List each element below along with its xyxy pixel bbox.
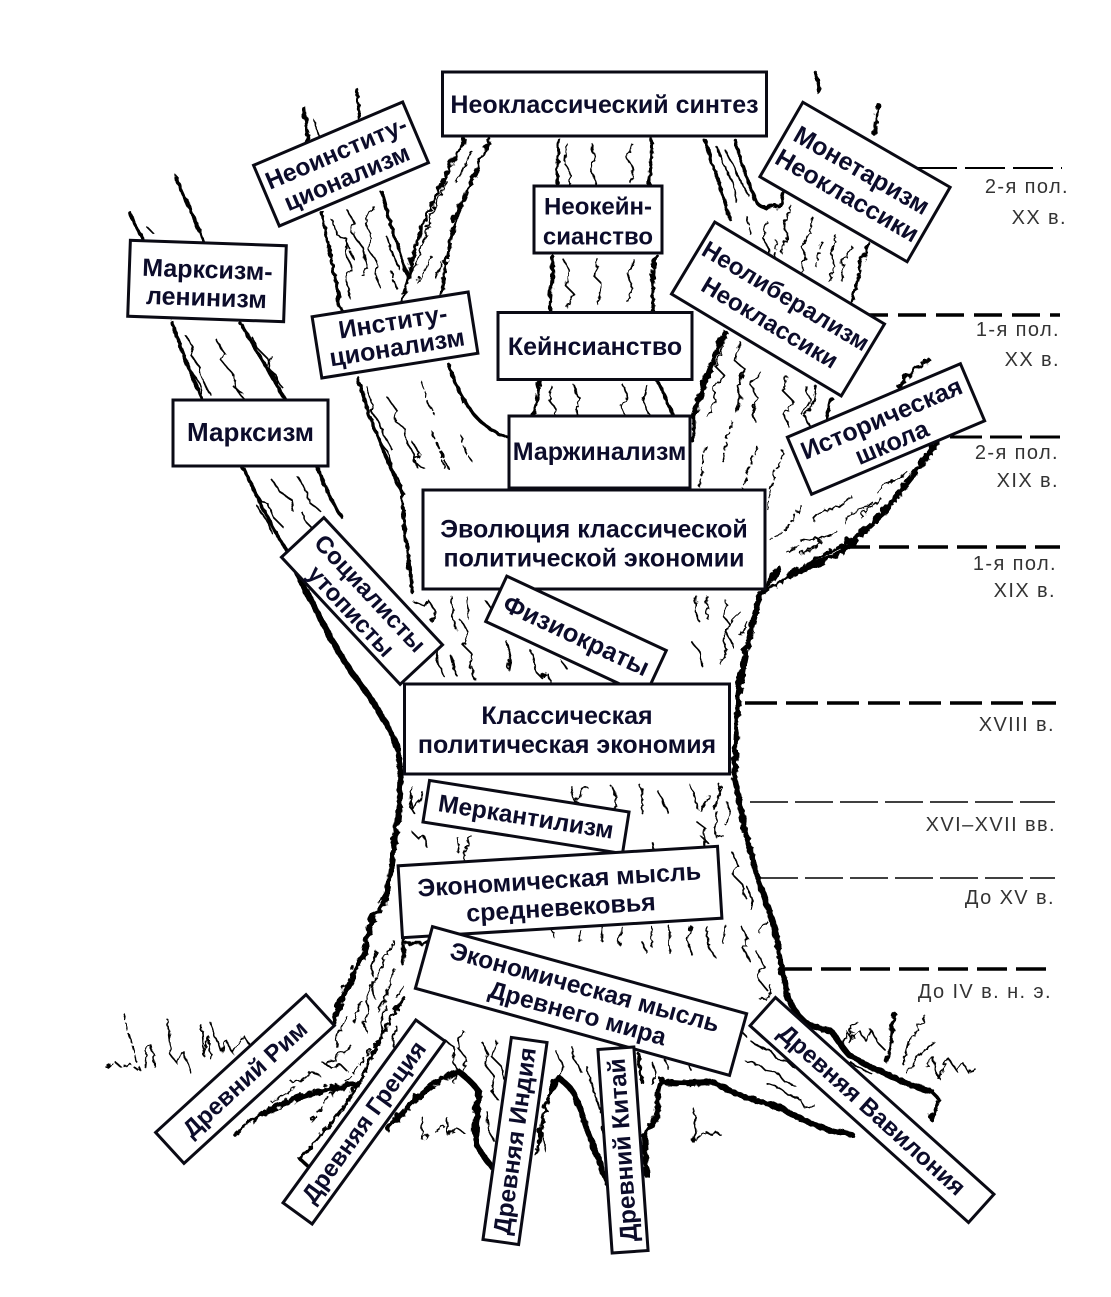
- label: Древняя Вавилония: Древняя Вавилония: [773, 1019, 971, 1201]
- grass right: [420, 1012, 973, 1140]
- label: Экономическая мысль Древнего мира: Экономическая мысль: [447, 938, 722, 1038]
- label: Институционализм: Институ-: [337, 300, 449, 345]
- era labels: До XV в.: [965, 887, 1055, 909]
- label: Экономическая мысль средневековья: средневековья: [465, 888, 656, 928]
- label: Физиократы: [486, 576, 666, 696]
- era labels: XVI–XVII вв.: [926, 814, 1056, 836]
- label: Кейнсианство: Кейнсианство: [508, 333, 682, 361]
- era labels: До IV в. н. э.: [918, 981, 1052, 1003]
- label: Монетаризм Неоклассики: Неоклассики: [770, 144, 924, 248]
- label: Неоклассический синтез: [442, 72, 766, 136]
- era labels: [918, 176, 1069, 1003]
- label: Экономическая мысль Древнего мира: Древнего мира: [486, 977, 670, 1052]
- label: Марксизм: [173, 400, 328, 466]
- grass left: [105, 1012, 247, 1072]
- label: Маржинализм: Маржинализм: [513, 438, 686, 466]
- label: Неоклассический синтез: Неоклассический синтез: [450, 91, 759, 119]
- era labels: XIX в.: [994, 580, 1056, 602]
- label: Эволюция классической политической экономии: [423, 490, 765, 589]
- label: Физиократы: Физиократы: [498, 590, 654, 682]
- era labels: XX в.: [1012, 207, 1067, 229]
- label: Неолиберализм Неоклассики: [672, 222, 884, 396]
- label: Марксизм-ленинизм: Марксизм-: [142, 254, 273, 286]
- label: Социалисты утописты: [281, 518, 443, 684]
- label: Марксизм-ленинизм: ленинизм: [146, 282, 267, 314]
- label: Неоинституционализм: Неоинститу-: [262, 111, 411, 195]
- era labels: 2-я пол.: [975, 442, 1059, 464]
- label: Кейнсианство: [498, 312, 692, 380]
- label: Историческая школа: школа: [851, 414, 934, 471]
- label: Экономическая мысль Древнего мира: [415, 927, 747, 1075]
- era labels: XVIII в.: [979, 714, 1055, 736]
- label: Неокейнсианство: Неокейн-: [544, 194, 652, 220]
- label: Институционализм: [312, 292, 478, 378]
- label: Марксизм-ленинизм: [128, 240, 286, 322]
- root and trunk ends: [233, 1053, 937, 1153]
- thick trunk edges: [260, 331, 935, 1183]
- label: Классическая политическая экономия: Классическая: [481, 702, 653, 730]
- label: Социалисты утописты: Социалисты: [309, 530, 431, 658]
- label: Меркантилизм: Меркантилизм: [436, 790, 615, 845]
- era labels: XIX в.: [997, 470, 1059, 492]
- label: Экономическая мысль средневековья: Экономическая мысль: [417, 857, 702, 903]
- label: Меркантилизм: [423, 780, 629, 854]
- label: Маржинализм: [509, 416, 690, 488]
- label: Неоинституционализм: ционализм: [280, 140, 414, 217]
- label: Историческая школа: [787, 364, 985, 494]
- tree outline: [127, 72, 933, 1168]
- label: Классическая политическая экономия: политическая экономия: [418, 731, 716, 759]
- label: Древняя Вавилония: [750, 998, 994, 1222]
- era labels: 1-я пол.: [976, 319, 1060, 341]
- label: Неолиберализм Неоклассики: Неолиберализм: [697, 236, 874, 357]
- era labels: 1-я пол.: [973, 553, 1057, 575]
- era labels: 2-я пол.: [985, 176, 1069, 198]
- tree illustration: [105, 72, 973, 1183]
- label: Институционализм: ционализм: [327, 323, 467, 372]
- era labels: XX в.: [1005, 349, 1060, 371]
- label: Эволюция классической политической экономии: Эволюция классической: [440, 516, 748, 544]
- label: Древний Китай: Древний Китай: [604, 1057, 643, 1242]
- label: Марксизм: Марксизм: [187, 417, 314, 447]
- label: Монетаризм Неоклассики: Монетаризм: [789, 121, 934, 221]
- label: Эволюция классической политической экономии: политической экономии: [444, 544, 744, 572]
- label: Неолиберализм Неоклассики: Неоклассики: [696, 272, 843, 374]
- label: Монетаризм Неоклассики: [760, 102, 950, 262]
- label: Экономическая мысль средневековья: [398, 846, 722, 938]
- label: Социалисты утописты: утописты: [302, 560, 400, 663]
- label: Древняя Индия: Древняя Индия: [489, 1046, 542, 1236]
- label: Неоинституционализм: [254, 102, 428, 226]
- bark texture: [145, 118, 905, 1150]
- label: Неокейнсианство: сианство: [543, 224, 653, 250]
- label: Древняя Греция: Древняя Греция: [297, 1036, 432, 1208]
- label: Древний Рим: [156, 995, 334, 1163]
- label: Неокейнсианство: [534, 186, 662, 253]
- era timeline lines: [745, 168, 1062, 969]
- label: Историческая школа: Историческая: [797, 372, 967, 466]
- label: Древний Рим: Древний Рим: [178, 1016, 313, 1143]
- label: Классическая политическая экономия: [404, 684, 730, 774]
